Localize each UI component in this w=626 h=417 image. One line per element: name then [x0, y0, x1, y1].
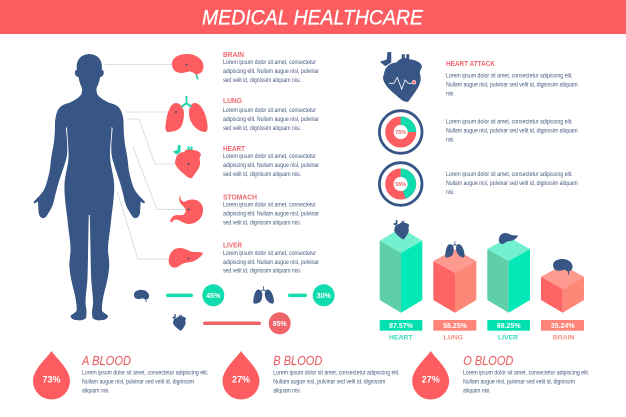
text block: heart attack: Nullam augue nisl, pulvinar sed velit id, dignissim aliquam — [446, 81, 578, 88]
text block: brain: BRAIN — [223, 50, 244, 59]
isometric bar: heart — [380, 220, 422, 342]
text block: A blood — [81, 353, 209, 394]
text block: heart: adipiscing elit. Nullam augue nisl, pulvinar — [223, 162, 319, 169]
isometric bar: brain — [541, 259, 584, 342]
text block: B blood: B BLOOD — [273, 353, 322, 368]
blood drop: A — [33, 351, 70, 400]
text block: lung: LUNG — [223, 96, 242, 105]
isometric bar: liver: LIVER — [498, 335, 518, 342]
icon: mini brain — [134, 290, 149, 302]
text block: A blood: Nullam augue nisl, pulvinar sed velit id, dignissim — [82, 379, 194, 386]
icon: heart attack — [380, 52, 422, 102]
blood drop: B — [222, 351, 260, 400]
text block: brain: adipiscing elit. Nullam augue nisl, pulvinar — [223, 68, 319, 75]
text block: heart: Lorem ipsum dolor sit amet, consectetur — [223, 153, 316, 160]
text block: donut 55%: Lorem ipsum dolor sit amet, consectetur adipiscing elit. — [446, 171, 573, 178]
text block: donut 55%: Nullam augue nisl, pulvinar sed velit id, dignissim aliquam — [446, 180, 578, 187]
text block: B blood: aliquam nisi. — [273, 387, 301, 394]
icon: lung organ — [165, 96, 208, 132]
blood drop: O — [412, 351, 449, 400]
text block: heart: HEART — [223, 144, 245, 153]
text block: donut 75%: Nullam augue nisl, pulvinar sed velit id, dignissim aliquam — [446, 127, 578, 134]
isometric bar: heart: HEART — [389, 335, 413, 342]
isometric bar: brain: 35.24% — [551, 323, 575, 330]
isometric bar: heart: 87.57% — [389, 323, 414, 330]
text block: lung: sed velit id, dignissim aliquam nisi. — [223, 125, 301, 132]
text block: stomach — [223, 192, 319, 226]
text block: stomach: Lorem ipsum dolor sit amet, consectetur — [223, 202, 316, 208]
isometric bar: lung — [433, 241, 476, 342]
text block: liver: LIVER — [223, 240, 243, 250]
text block: brain: Lorem ipsum dolor sit amet, consectetur — [223, 59, 316, 66]
isometric bar: brain: BRAIN — [553, 335, 575, 342]
blood drop: A: 73% — [42, 374, 61, 384]
isometric bar: lung: 58.25% — [443, 323, 468, 330]
stat bar: brain 45% — [166, 284, 224, 306]
text block: donut 55%: nisi. — [446, 189, 455, 196]
text block: donut 75% — [446, 118, 578, 143]
icon: brain organ — [172, 54, 204, 80]
text block: lung — [223, 96, 319, 132]
icon: heart organ — [173, 145, 201, 178]
text block: heart attack — [446, 59, 578, 97]
text block: B blood: Lorem ipsum dolor sit amet, consectetur adipiscing elit. — [273, 370, 400, 377]
stat bar: brain 45%: 45% — [206, 293, 221, 300]
stat bar: lung 30% — [288, 284, 335, 306]
icon: stomach organ — [170, 194, 203, 224]
title: MEDICAL HEALTHCARE — [202, 6, 424, 30]
donut chart: 75% — [379, 111, 422, 153]
text block: liver: adipiscing elit. Nullam augue nisl, pulvinar — [223, 259, 319, 266]
text block: brain: sed velit id, dignissim aliquam nisi. — [223, 77, 301, 84]
text block: O blood: aliquam nisi. — [463, 387, 491, 394]
text block: stomach: adipiscing elit. Nullam augue nisl, pulvinar — [223, 210, 319, 217]
text block: A blood: Lorem ipsum dolor sit amet, consectetur adipiscing elit. — [82, 370, 209, 377]
text block: B blood: Nullam augue nisl, pulvinar sed velit id, dignissim — [273, 379, 385, 386]
text block: O blood: Lorem ipsum dolor sit amet, consectetur adipiscing elit. — [463, 370, 590, 377]
blood drop: O: 27% — [422, 374, 440, 384]
icon: mini lungs — [253, 286, 274, 304]
header banner — [0, 0, 626, 34]
text block: heart attack: HEART ATTACK — [446, 59, 496, 68]
text block: heart attack: Lorem ipsum dolor sit amet, consectetur adipiscing elit. — [446, 72, 573, 79]
text block: O blood: O BLOOD — [463, 353, 513, 368]
text block: B blood — [273, 353, 400, 394]
isometric bar: liver — [487, 233, 530, 342]
text block: liver: sed velit id, dignissim aliquam nisi. — [223, 268, 301, 274]
leader lines — [105, 64, 188, 259]
stat bar: lung 30%: 30% — [317, 293, 331, 300]
stat bar: heart 85% — [203, 312, 291, 334]
text block: brain — [223, 50, 319, 84]
text block: liver — [223, 240, 319, 274]
text block: heart — [223, 144, 319, 178]
human body silhouette — [34, 54, 145, 320]
isometric bar: lung: LUNG — [444, 335, 463, 342]
text block: A blood: aliquam nisi. — [82, 387, 110, 394]
text block: donut 55% — [446, 171, 578, 196]
text block: O blood — [463, 353, 590, 394]
text block: stomach: sed velit id, dignissim aliquam nisi. — [223, 219, 301, 226]
text block: donut 75%: Lorem ipsum dolor sit amet, consectetur adipiscing elit. — [446, 118, 573, 125]
donut chart: 75%: 75% — [395, 130, 406, 136]
donut chart: 55% — [379, 163, 422, 205]
text block: lung: Lorem ipsum dolor sit amet, consectetur — [223, 107, 316, 114]
donut chart: 55%: 55% — [395, 182, 406, 188]
text block: heart attack: nisi. — [446, 90, 455, 97]
text block: liver: Lorem ipsum dolor sit amet, consectetur — [223, 250, 316, 257]
stat bar: heart 85%: 85% — [273, 321, 287, 328]
text block: heart: sed velit id, dignissim aliquam nisi. — [223, 171, 301, 178]
isometric bar: liver: 68.25% — [497, 323, 521, 330]
icon: liver organ — [169, 248, 203, 268]
text block: donut 75%: nisi. — [446, 136, 455, 143]
text block: lung: adipiscing elit. Nullam augue nisl, pulvinar — [223, 116, 319, 123]
text block: stomach: STOMACH — [223, 192, 257, 202]
text block: A blood: A BLOOD — [81, 353, 131, 368]
blood drop: B: 27% — [232, 374, 250, 384]
icon: mini heart — [172, 314, 186, 331]
text block: O blood: Nullam augue nisl, pulvinar sed velit id, dignissim — [463, 379, 575, 386]
